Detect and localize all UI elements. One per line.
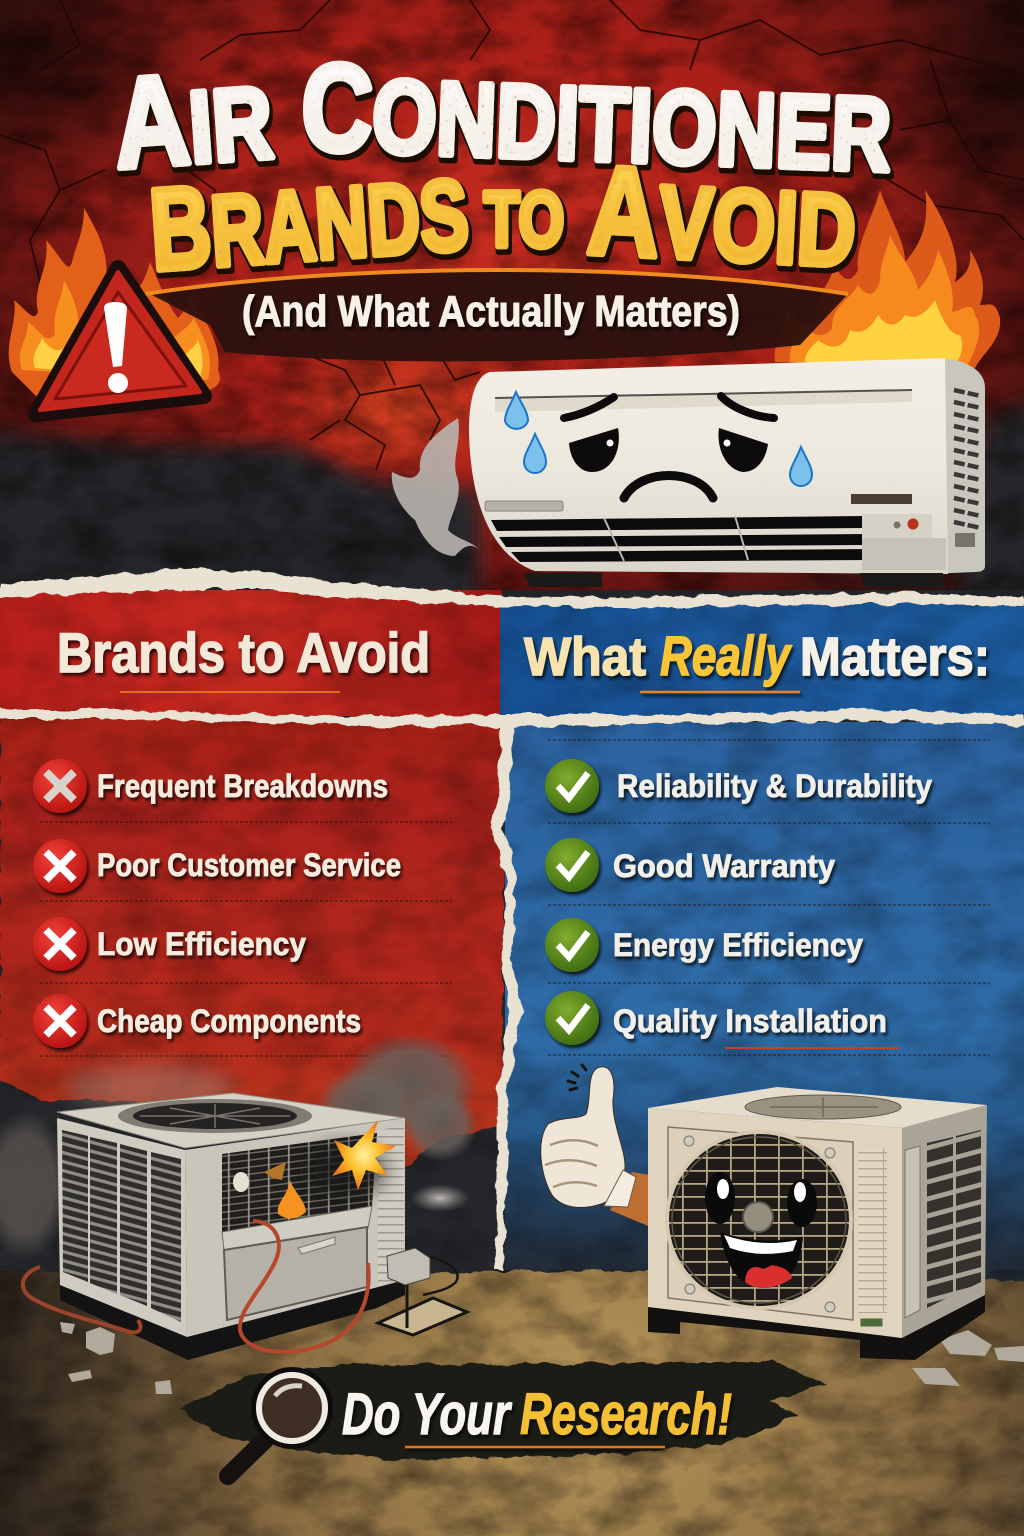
title: Air Conditioner: CONDITIONER bbox=[299, 38, 894, 198]
item: quality installation: Quality Installation bbox=[613, 1003, 887, 1039]
unit side face bbox=[902, 1105, 987, 1338]
dividers bbox=[40, 740, 990, 1056]
ground bbox=[0, 1270, 1024, 1536]
fan top bbox=[118, 1099, 312, 1133]
gauge bbox=[233, 1172, 249, 1192]
screws bbox=[684, 1136, 835, 1312]
air vent louvers bbox=[491, 516, 872, 562]
feet and base bbox=[648, 1290, 985, 1360]
item: good warranty: Good Warranty bbox=[613, 848, 835, 884]
torn paper edges bbox=[0, 569, 1024, 1270]
icon: magnifying glass bbox=[228, 1367, 333, 1476]
water drops bbox=[505, 392, 812, 486]
right slats column bbox=[378, 1126, 404, 1286]
heading: Brands to Avoid: Brands to Avoid bbox=[57, 621, 430, 684]
title: Air Conditioner: AIR bbox=[109, 42, 277, 196]
item: reliability and durability bbox=[545, 759, 932, 813]
texture: header grunge bbox=[0, 590, 1024, 720]
title: Brands to Avoid bbox=[146, 139, 859, 295]
item: cheap components: Cheap Components bbox=[97, 1003, 361, 1039]
control panel bbox=[485, 494, 975, 570]
sad face bbox=[564, 396, 774, 498]
burnt grille opening bbox=[222, 1133, 377, 1232]
side grilles bbox=[905, 1130, 981, 1318]
unit top bbox=[648, 1087, 987, 1128]
flames: left bbox=[9, 208, 220, 400]
item: low efficiency bbox=[33, 917, 306, 971]
list: brands to avoid bbox=[33, 759, 401, 1048]
top trim slot bbox=[495, 390, 912, 412]
front grille strip bbox=[858, 1148, 887, 1313]
item: quality installation bbox=[545, 991, 900, 1048]
left grilles bbox=[62, 1130, 181, 1322]
brush stroke bbox=[180, 1362, 825, 1460]
flames: right bbox=[775, 190, 1000, 368]
burning debris bbox=[264, 1162, 286, 1180]
happy outdoor unit bbox=[648, 1087, 987, 1360]
background: cracked red wall bbox=[0, 0, 1024, 610]
smoke: wall unit bbox=[392, 418, 483, 556]
text: Do Your Research: Do Your bbox=[342, 1382, 513, 1447]
panel handle bbox=[298, 1237, 335, 1254]
title: Brands to Avoid: BRANDS bbox=[146, 144, 472, 295]
item: low efficiency: Low Efficiency bbox=[97, 926, 306, 962]
unit feet bbox=[524, 573, 943, 587]
side vents bbox=[954, 390, 981, 528]
happy face bbox=[705, 1172, 817, 1288]
item: cheap components bbox=[33, 994, 361, 1048]
text: Do Your Research: Research! bbox=[520, 1382, 732, 1447]
texture: lists grunge bbox=[0, 715, 1024, 1275]
subtitle banner: (And What Actually Matters) bbox=[242, 287, 740, 336]
rubble bbox=[60, 1322, 1024, 1394]
base bbox=[60, 1280, 405, 1360]
panel: header right blue bbox=[500, 600, 1024, 720]
spark bbox=[332, 1120, 396, 1190]
heading: What Really Matters: Matters: bbox=[800, 627, 990, 687]
fan hub bbox=[743, 1202, 773, 1232]
subtitle banner bbox=[145, 270, 848, 361]
item: frequent breakdowns: Frequent Breakdowns bbox=[97, 768, 388, 804]
smoke: broken unit bbox=[0, 1033, 478, 1260]
red wire bbox=[240, 1221, 369, 1352]
item: energy efficiency: Energy Efficiency bbox=[613, 927, 863, 963]
left wire bbox=[23, 1267, 140, 1332]
unit side panel bbox=[930, 358, 985, 574]
fan top bbox=[745, 1095, 901, 1119]
item: reliability and durability: Reliability & Durability bbox=[617, 768, 932, 804]
unit front face bbox=[648, 1108, 902, 1338]
title: Brands to Avoid: TO bbox=[484, 175, 564, 263]
panel: lists left red bbox=[0, 715, 503, 1165]
item: good warranty bbox=[545, 838, 835, 892]
motor part bbox=[387, 1248, 430, 1285]
title: Air Conditioner bbox=[109, 38, 894, 198]
unit left face bbox=[57, 1118, 187, 1337]
unit front body bbox=[469, 358, 948, 574]
icon: warning triangle bbox=[36, 268, 204, 414]
rating label bbox=[860, 1318, 883, 1327]
list: what really matters bbox=[545, 759, 932, 1048]
heading: What Really Matters bbox=[524, 624, 990, 692]
title: Brands to Avoid: AVOID bbox=[585, 139, 859, 293]
item: poor customer service bbox=[33, 839, 401, 893]
text: Do Your Research bbox=[342, 1382, 732, 1447]
fan grille bbox=[667, 1132, 851, 1308]
lower strip bbox=[222, 1206, 372, 1250]
dark wire bbox=[423, 1257, 458, 1295]
unit right face bbox=[185, 1118, 405, 1337]
front inset panel bbox=[668, 1127, 853, 1320]
unit top bbox=[57, 1093, 405, 1148]
item: poor customer service: Poor Customer Service bbox=[97, 847, 401, 883]
icon: thumbs up hand bbox=[541, 1065, 650, 1226]
lower access panel bbox=[224, 1227, 367, 1320]
fallen plate bbox=[378, 1285, 467, 1335]
broken outdoor unit bbox=[23, 1093, 467, 1360]
panel: lists right blue bbox=[505, 722, 1024, 1290]
flame bbox=[278, 1180, 306, 1219]
heading: What Really Matters: What bbox=[524, 627, 646, 687]
scorch marks bbox=[305, 1146, 385, 1194]
call to action banner bbox=[180, 1362, 825, 1476]
heading: What Really Matters: Really bbox=[660, 624, 792, 687]
sad wall air conditioner bbox=[469, 358, 985, 587]
panel: header left red bbox=[0, 590, 502, 716]
item: energy efficiency bbox=[545, 918, 863, 972]
item: frequent breakdowns bbox=[33, 759, 388, 813]
